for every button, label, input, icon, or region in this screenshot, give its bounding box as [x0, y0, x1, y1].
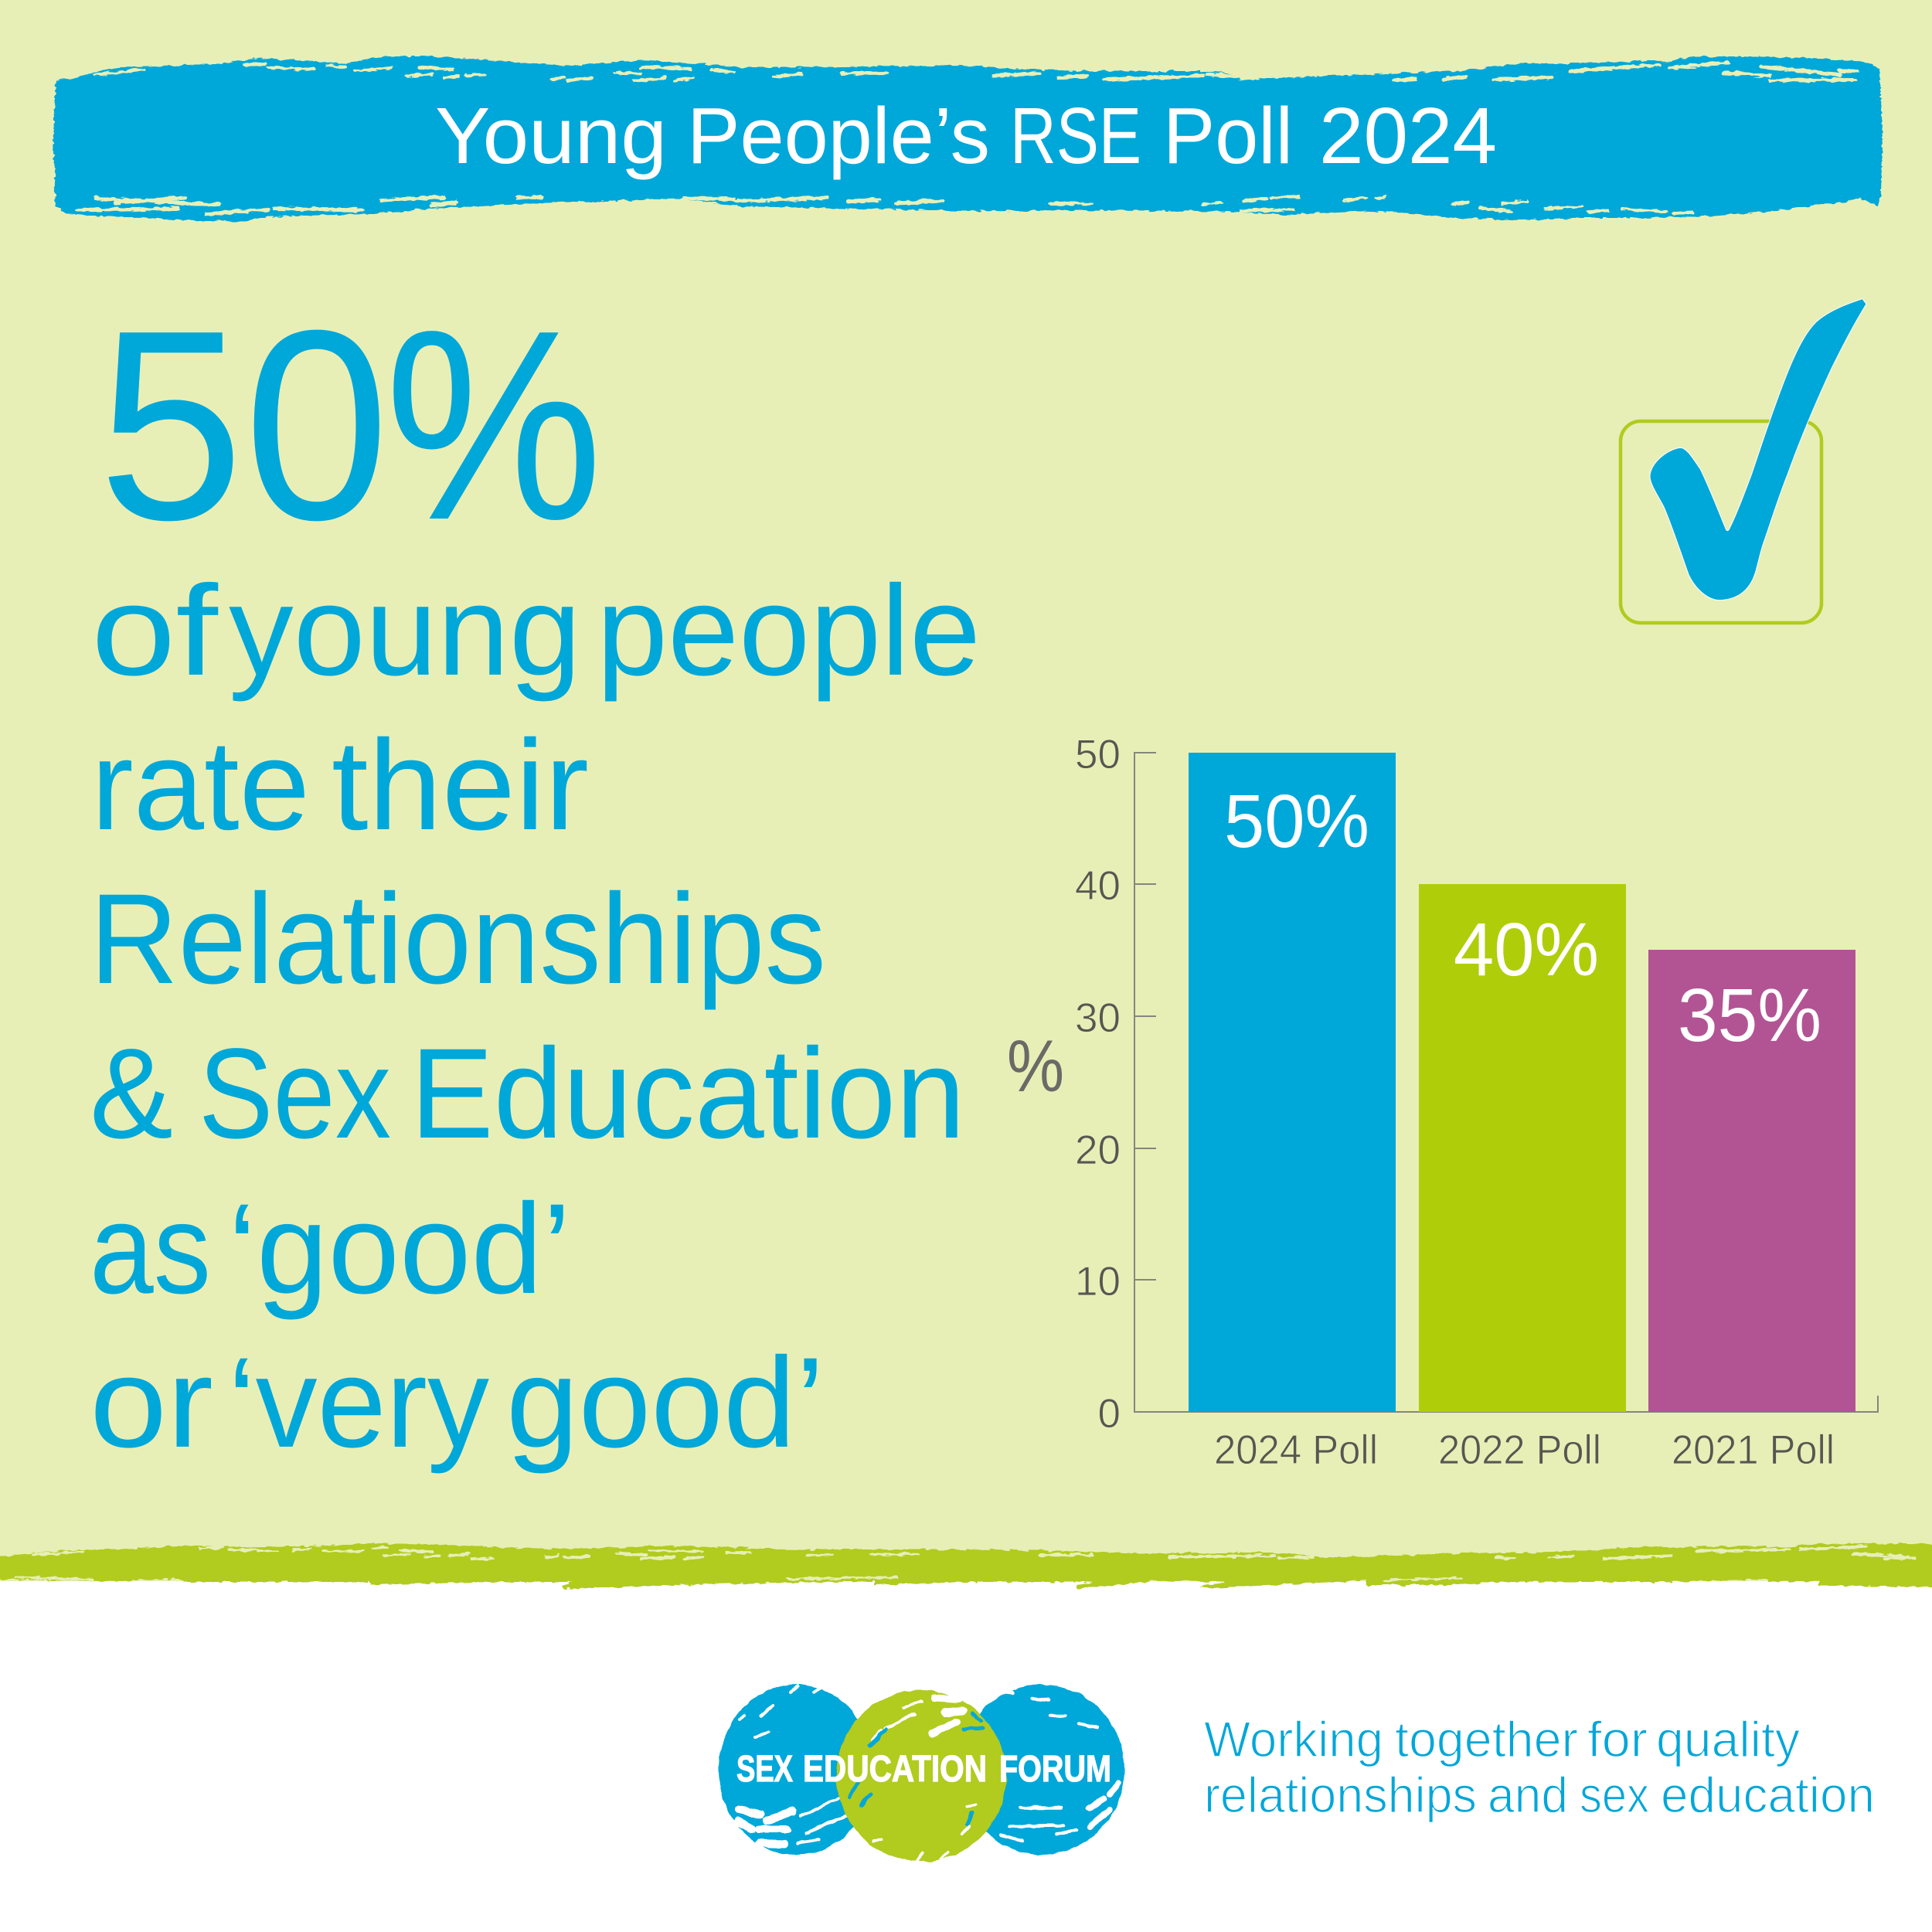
statement text: of: [91, 560, 219, 702]
strapline: quality: [1656, 1711, 1800, 1767]
logo scribble circles: [719, 1685, 1124, 1862]
statement text: ‘very: [228, 1332, 489, 1475]
title text: RSE: [1010, 91, 1141, 180]
bar: 2022 poll: 40%: [1454, 907, 1599, 992]
x axis labels: 2021 Poll: [1672, 1427, 1835, 1473]
logo wordmark: SEX: [736, 1749, 793, 1790]
x axis labels: 2024 Poll: [1214, 1427, 1378, 1473]
x axis labels: [1214, 1427, 1835, 1473]
strapline: [1204, 1711, 1875, 1823]
title text: Young: [435, 91, 667, 180]
strapline: education: [1661, 1767, 1875, 1823]
x axis labels: 2022 Poll: [1438, 1427, 1601, 1473]
title banner: [53, 56, 1883, 222]
statement text: as: [90, 1178, 211, 1321]
statement text: young: [229, 560, 581, 702]
strapline: for: [1587, 1711, 1648, 1767]
y axis labels: 50: [1075, 732, 1121, 777]
bar: 2024 poll: 50%: [1224, 779, 1369, 863]
bar: 2022 poll: [1419, 884, 1626, 1412]
icon: tick in checkbox: [1621, 299, 1866, 623]
statement text: people: [597, 560, 981, 702]
big statistic: %: [385, 274, 603, 577]
statement text: good’: [506, 1332, 825, 1475]
statement text: ‘good’: [228, 1178, 571, 1321]
logo wordmark: EDUCATION: [803, 1749, 987, 1790]
statement text: Sex: [199, 1022, 391, 1165]
title text: [435, 91, 1497, 180]
bar chart: [1007, 732, 1878, 1473]
big statistic: [98, 274, 603, 577]
statement text: or: [90, 1332, 213, 1475]
bar: 2021 poll: 35%: [1678, 973, 1821, 1057]
bar: 2024 poll: [1189, 753, 1396, 1412]
y axis unit: %: [1007, 1026, 1064, 1107]
logo wordmark: [736, 1749, 1111, 1790]
big statistic: 50: [98, 274, 389, 577]
y axis labels: [1075, 732, 1121, 1437]
y axis labels: 0: [1098, 1391, 1121, 1437]
bar: 2021 poll: [1648, 950, 1855, 1412]
statement text: [90, 560, 981, 1475]
statement text: &: [90, 1022, 173, 1165]
footer panel: [0, 1581, 1932, 1932]
y axis labels: 30: [1075, 995, 1121, 1041]
logo wordmark: FORUM: [999, 1749, 1111, 1790]
strapline: Working: [1204, 1711, 1383, 1767]
statement text: rate: [91, 714, 310, 857]
statement text: Education: [410, 1022, 965, 1165]
statement text: their: [332, 714, 589, 857]
title text: 2024: [1319, 91, 1497, 180]
strapline: together: [1395, 1711, 1578, 1767]
statement text: Relationships: [90, 868, 826, 1011]
y axis labels: 20: [1075, 1128, 1121, 1173]
title text: People’s: [687, 91, 990, 180]
y axis labels: 40: [1075, 863, 1121, 909]
logo: Sex Education Forum: [719, 1685, 1124, 1862]
green brush stripe: [0, 1543, 1932, 1589]
y axis labels: 10: [1075, 1259, 1121, 1304]
title text: Poll: [1163, 91, 1293, 180]
strapline: sex: [1580, 1767, 1649, 1823]
strapline: and: [1488, 1767, 1568, 1823]
chart axes: [1134, 753, 1878, 1412]
strapline: relationships: [1204, 1767, 1477, 1823]
